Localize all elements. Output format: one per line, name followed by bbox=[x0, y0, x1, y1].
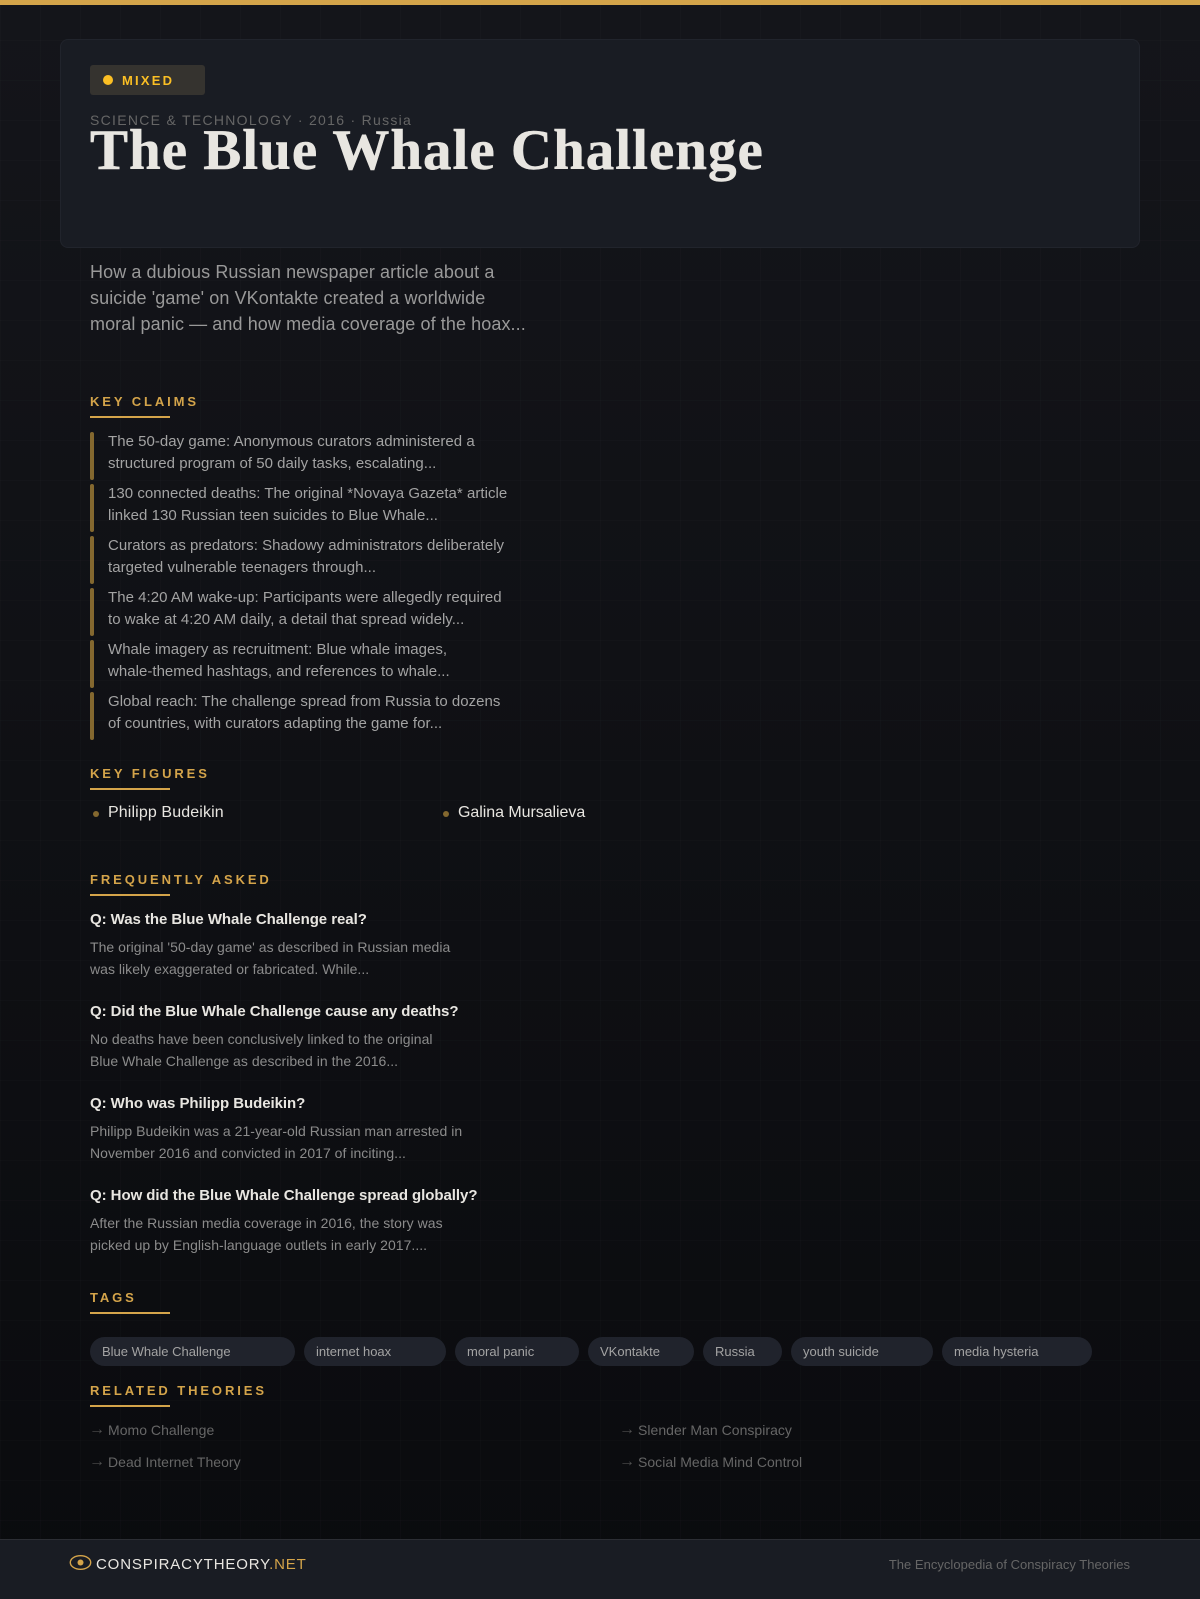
tag bbox=[791, 1337, 933, 1366]
claim 2: 130 connected deaths: The original *Novaya Gazeta* article bbox=[108, 485, 507, 502]
heading: frequently asked: FREQUENTLY ASKED bbox=[90, 872, 272, 887]
tag bbox=[588, 1337, 694, 1366]
tag bbox=[90, 1337, 295, 1366]
claim 1: The 50-day game: Anonymous curators administered a bbox=[108, 433, 475, 450]
tag: internet hoax bbox=[316, 1344, 391, 1359]
claims list bbox=[90, 432, 507, 740]
tag: Russia bbox=[715, 1344, 755, 1359]
tag: Blue Whale Challenge bbox=[102, 1344, 231, 1359]
claim 6: Global reach: The challenge spread from Russia to dozens bbox=[108, 693, 500, 710]
claim 2 bbox=[90, 484, 507, 532]
claim 3 bbox=[90, 536, 504, 584]
heading: tags: TAGS bbox=[90, 1290, 137, 1305]
link: → bbox=[89, 1453, 105, 1470]
FAQ 4 bbox=[90, 1187, 477, 1253]
FAQ 1: The original '50-day game' as described in Russian media bbox=[90, 939, 450, 955]
icon: status dot bbox=[103, 75, 113, 85]
claim 6: of countries, with curators adapting the game for... bbox=[108, 715, 442, 732]
FAQ 3: Q: Who was Philipp Budeikin? bbox=[90, 1095, 305, 1112]
tag bbox=[703, 1337, 782, 1366]
claim 4 bbox=[90, 588, 502, 636]
figure: Galina Mursalieva bbox=[443, 804, 586, 821]
tags row bbox=[90, 1337, 1092, 1366]
lead summary: How a dubious Russian newspaper article about a bbox=[90, 262, 494, 282]
claim 5: whale-themed hashtags, and references to whale... bbox=[108, 663, 450, 680]
tag bbox=[942, 1337, 1092, 1366]
bullet bbox=[443, 811, 449, 817]
claim 5 bbox=[90, 640, 450, 688]
lead summary: moral panic — and how media coverage of the hoax... bbox=[90, 314, 526, 334]
tag: youth suicide bbox=[803, 1344, 879, 1359]
link: Slender Man Conspiracy bbox=[638, 1422, 792, 1438]
FAQ 3 bbox=[90, 1095, 462, 1161]
FAQ 3: November 2016 and convicted in 2017 of inciting... bbox=[90, 1145, 406, 1161]
link: Dead Internet Theory bbox=[108, 1454, 241, 1470]
tag: moral panic bbox=[467, 1344, 534, 1359]
tag bbox=[304, 1337, 446, 1366]
link: → bbox=[619, 1421, 635, 1438]
bullet bbox=[93, 811, 99, 817]
FAQ 1: Q: Was the Blue Whale Challenge real? bbox=[90, 911, 367, 928]
panel: footer bbox=[0, 1539, 1200, 1599]
heading: key claims: KEY CLAIMS bbox=[90, 394, 199, 409]
heading: related theories: RELATED THEORIES bbox=[90, 1383, 267, 1398]
tag: VKontakte bbox=[600, 1344, 660, 1359]
FAQ 2 bbox=[90, 1003, 458, 1069]
lead summary: suicide 'game' on VKontakte created a worldwide bbox=[90, 288, 485, 308]
FAQ 2: No deaths have been conclusively linked to the original bbox=[90, 1031, 433, 1047]
panel: header card bbox=[60, 39, 1140, 248]
claim 4: to wake at 4:20 AM daily, a detail that spread widely... bbox=[108, 611, 464, 628]
claim 6 bbox=[90, 692, 500, 740]
FAQ 2: Q: Did the Blue Whale Challenge cause any deaths? bbox=[90, 1003, 458, 1020]
claim 1: structured program of 50 daily tasks, escalating... bbox=[108, 455, 436, 472]
tag: media hysteria bbox=[954, 1344, 1039, 1359]
link: → bbox=[619, 1453, 635, 1470]
FAQ 1: was likely exaggerated or fabricated. While... bbox=[90, 961, 369, 977]
logo wordmark: CONSPIRACYTHEORY.NET bbox=[96, 1556, 307, 1573]
name: Galina Mursalieva bbox=[458, 804, 585, 821]
FAQ 2: Blue Whale Challenge as described in the 2016... bbox=[90, 1053, 398, 1069]
heading: key figures: KEY FIGURES bbox=[90, 766, 210, 781]
claim 4: The 4:20 AM wake-up: Participants were allegedly required bbox=[108, 589, 502, 606]
verdict badge bbox=[90, 65, 205, 95]
link: → bbox=[89, 1421, 105, 1438]
FAQ 3: Philipp Budeikin was a 21-year-old Russian man arrested in bbox=[90, 1123, 462, 1139]
FAQ 4: picked up by English-language outlets in early 2017.... bbox=[90, 1237, 427, 1253]
title: The Blue Whale Challenge bbox=[90, 119, 764, 182]
link: Momo Challenge bbox=[108, 1422, 214, 1438]
FAQ 1 bbox=[90, 911, 450, 977]
top accent bar bbox=[0, 0, 1200, 5]
claim 3: Curators as predators: Shadowy administrators deliberately bbox=[108, 537, 504, 554]
figure: Philipp Budeikin bbox=[93, 804, 224, 821]
FAQ 4: Q: How did the Blue Whale Challenge spread globally? bbox=[90, 1187, 477, 1204]
icon: eye logo bbox=[70, 1555, 92, 1570]
claim 2: linked 130 Russian teen suicides to Blue Whale... bbox=[108, 507, 438, 524]
name: Philipp Budeikin bbox=[108, 804, 224, 821]
FAQ 4: After the Russian media coverage in 2016, the story was bbox=[90, 1215, 443, 1231]
category meta line: SCIENCE & TECHNOLOGY · 2016 · Russia bbox=[90, 112, 412, 128]
badge label: MIXED bbox=[122, 73, 174, 88]
lead summary bbox=[90, 262, 526, 334]
claim 3: targeted vulnerable teenagers through... bbox=[108, 559, 376, 576]
claim 5: Whale imagery as recruitment: Blue whale images, bbox=[108, 641, 447, 658]
claim 1 bbox=[90, 432, 475, 480]
related links bbox=[89, 1421, 802, 1470]
link: Social Media Mind Control bbox=[638, 1454, 802, 1470]
footer tagline: The Encyclopedia of Conspiracy Theories bbox=[889, 1557, 1130, 1572]
tag bbox=[455, 1337, 579, 1366]
